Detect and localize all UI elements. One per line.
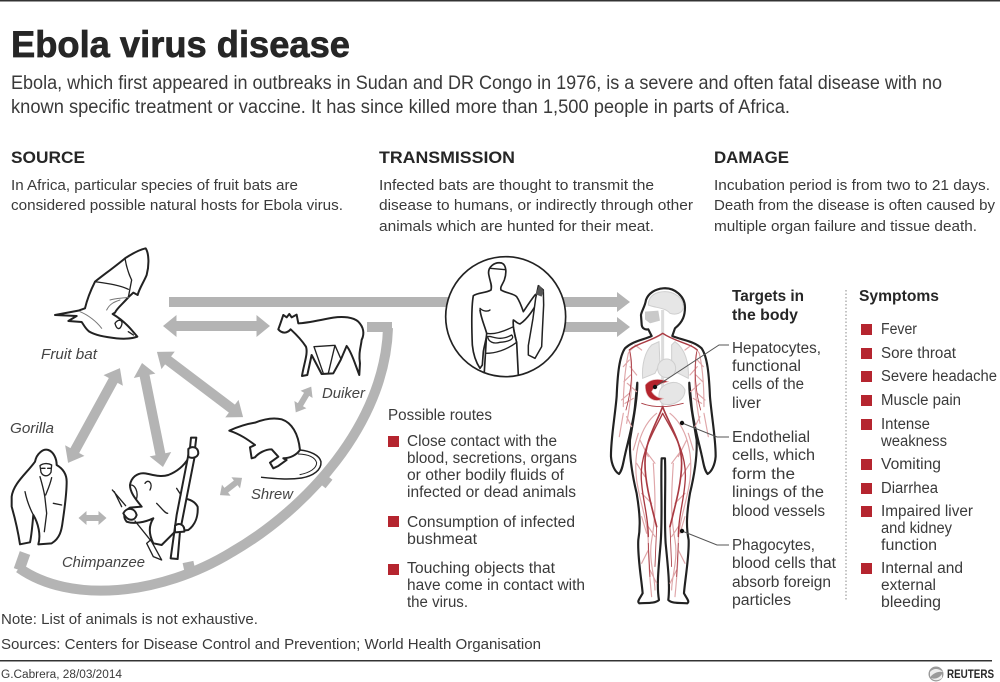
heading: targets in the body: Targets in <box>732 288 804 305</box>
arrow: gorilla and chimpanzee <box>78 511 106 525</box>
arrow: bat and duiker <box>163 315 270 337</box>
panel: transmission text: TRANSMISSION <box>379 148 515 167</box>
arrow: bat and chimpanzee <box>131 361 174 469</box>
arrow: duiker and shrew <box>290 383 317 416</box>
panel: transmission text: disease to humans, or indirectly through other <box>379 198 693 214</box>
text: hepatocytes <box>732 340 821 412</box>
panel: damage text <box>714 148 996 235</box>
text: phagocytes: particles <box>732 592 791 609</box>
title: Ebola virus disease <box>11 24 350 65</box>
list: symptoms: Fever <box>881 321 917 338</box>
arrow: human to body upper <box>562 292 630 312</box>
intro text: known specific treatment or vaccine. It has since killed more than 1,500 people in parts of Africa. <box>11 97 790 118</box>
icon: gorilla <box>12 450 67 544</box>
logo: Reuters <box>928 666 994 682</box>
arrow: big curved route bar <box>19 322 392 591</box>
text: phagocytes: blood cells that <box>732 555 837 572</box>
list: possible routes: have come in contact with <box>407 577 585 594</box>
note: Note: List of animals is not exhaustive. <box>1 611 258 628</box>
text: hepatocytes: Hepatocytes, <box>732 340 821 357</box>
text: phagocytes: Phagocytes, <box>732 537 815 554</box>
panel: source text <box>11 148 343 214</box>
arrow: bat to human bar <box>169 297 449 307</box>
panel: damage text: multiple organ failure and tissue death. <box>714 219 977 235</box>
list: possible routes: blood, secretions, organs <box>407 450 577 467</box>
list: symptoms: Severe headache <box>881 368 997 385</box>
heading: targets in the body: the body <box>732 307 798 324</box>
list: possible routes <box>388 433 585 611</box>
label: possible routes heading: Possible routes <box>388 407 492 424</box>
list: symptoms: Intense <box>881 416 930 433</box>
label: duiker: Duiker <box>322 385 366 402</box>
panel: transmission text: Infected bats are thought to transmit the <box>379 178 654 194</box>
arrow: human to body lower <box>562 317 630 337</box>
panel: damage text: DAMAGE <box>714 148 789 167</box>
panel: damage text: Incubation period is from two to 21 days. <box>714 178 990 194</box>
text: hepatocytes: functional <box>732 358 801 375</box>
panel: transmission text <box>379 148 693 235</box>
icon: hunter with animal in circle <box>446 257 566 377</box>
list: symptoms: Vomiting <box>881 456 941 473</box>
list: possible routes: Close contact with the <box>407 433 557 450</box>
list: symptoms: Sore throat <box>881 345 957 362</box>
text: hepatocytes: liver <box>732 395 761 412</box>
list: possible routes: bushmeat <box>407 531 478 548</box>
icon: shrew <box>229 419 321 479</box>
icon: chimpanzee <box>112 438 198 560</box>
list: symptoms: Diarrhea <box>881 480 938 497</box>
leader: hepatocytes <box>653 345 729 389</box>
list: symptoms: bleeding <box>881 594 941 611</box>
list: symptoms: Muscle pain <box>881 392 961 409</box>
panel: source text: considered possible natural hosts for Ebola virus. <box>11 198 343 214</box>
label: fruit bat: Fruit bat <box>41 346 98 363</box>
intro text <box>11 73 942 118</box>
panel: damage text: Death from the disease is often caused by <box>714 198 996 214</box>
credit: G.Cabrera, 28/03/2014 <box>1 669 123 681</box>
list: symptoms: Internal and <box>881 560 963 577</box>
panel: source text: SOURCE <box>11 148 85 167</box>
label: shrew: Shrew <box>251 486 294 503</box>
list: possible routes: Consumption of infected <box>407 514 575 531</box>
arrow: bat and gorilla <box>58 363 130 468</box>
list: symptoms: Impaired liver <box>881 503 973 520</box>
list: possible routes: the virus. <box>407 594 468 611</box>
text: hepatocytes: cells of the <box>732 376 804 393</box>
list: symptoms: external <box>881 577 936 594</box>
heading: symptoms: Symptoms <box>859 288 939 305</box>
label: gorilla: Gorilla <box>10 420 54 437</box>
list: symptoms: and kidney <box>881 520 952 537</box>
list: symptoms <box>861 321 997 611</box>
arrow: bat and shrew <box>150 343 250 426</box>
leader: phagocytes <box>680 529 729 545</box>
icon: fruit bat <box>55 248 148 339</box>
sources: Sources: Centers for Disease Control and Prevention; World Health Organisation <box>1 636 541 653</box>
icon: duiker <box>278 314 363 376</box>
text: endothelial cells: form the <box>732 466 795 483</box>
panel: transmission text: animals which are hunted for their meat. <box>379 219 654 235</box>
text: endothelial cells: blood vessels <box>732 503 825 520</box>
icon: human body with blood vessels <box>611 288 716 603</box>
text: phagocytes: absorb foreign <box>732 574 831 591</box>
label: chimpanzee: Chimpanzee <box>62 554 145 571</box>
text: endothelial cells: cells, which <box>732 447 815 464</box>
arrow: shrew and chimpanzee <box>216 472 246 501</box>
list: symptoms: weakness <box>880 433 947 450</box>
text: endothelial cells <box>732 429 825 520</box>
list: symptoms: function <box>881 537 937 554</box>
text: endothelial cells: Endothelial <box>732 429 810 446</box>
list: possible routes: infected or dead animals <box>407 484 576 501</box>
intro text: Ebola, which first appeared in outbreaks in Sudan and DR Congo in 1976, is a severe and often fatal disease with no <box>11 73 942 94</box>
heading: targets in the body <box>732 288 804 324</box>
list: possible routes: Touching objects that <box>407 560 556 577</box>
text: phagocytes <box>732 537 837 609</box>
panel: source text: In Africa, particular species of fruit bats are <box>11 178 298 194</box>
list: possible routes: or other bodily fluids of <box>407 467 565 484</box>
leader: endothelial cells <box>680 421 729 437</box>
text: endothelial cells: linings of the <box>732 484 824 501</box>
